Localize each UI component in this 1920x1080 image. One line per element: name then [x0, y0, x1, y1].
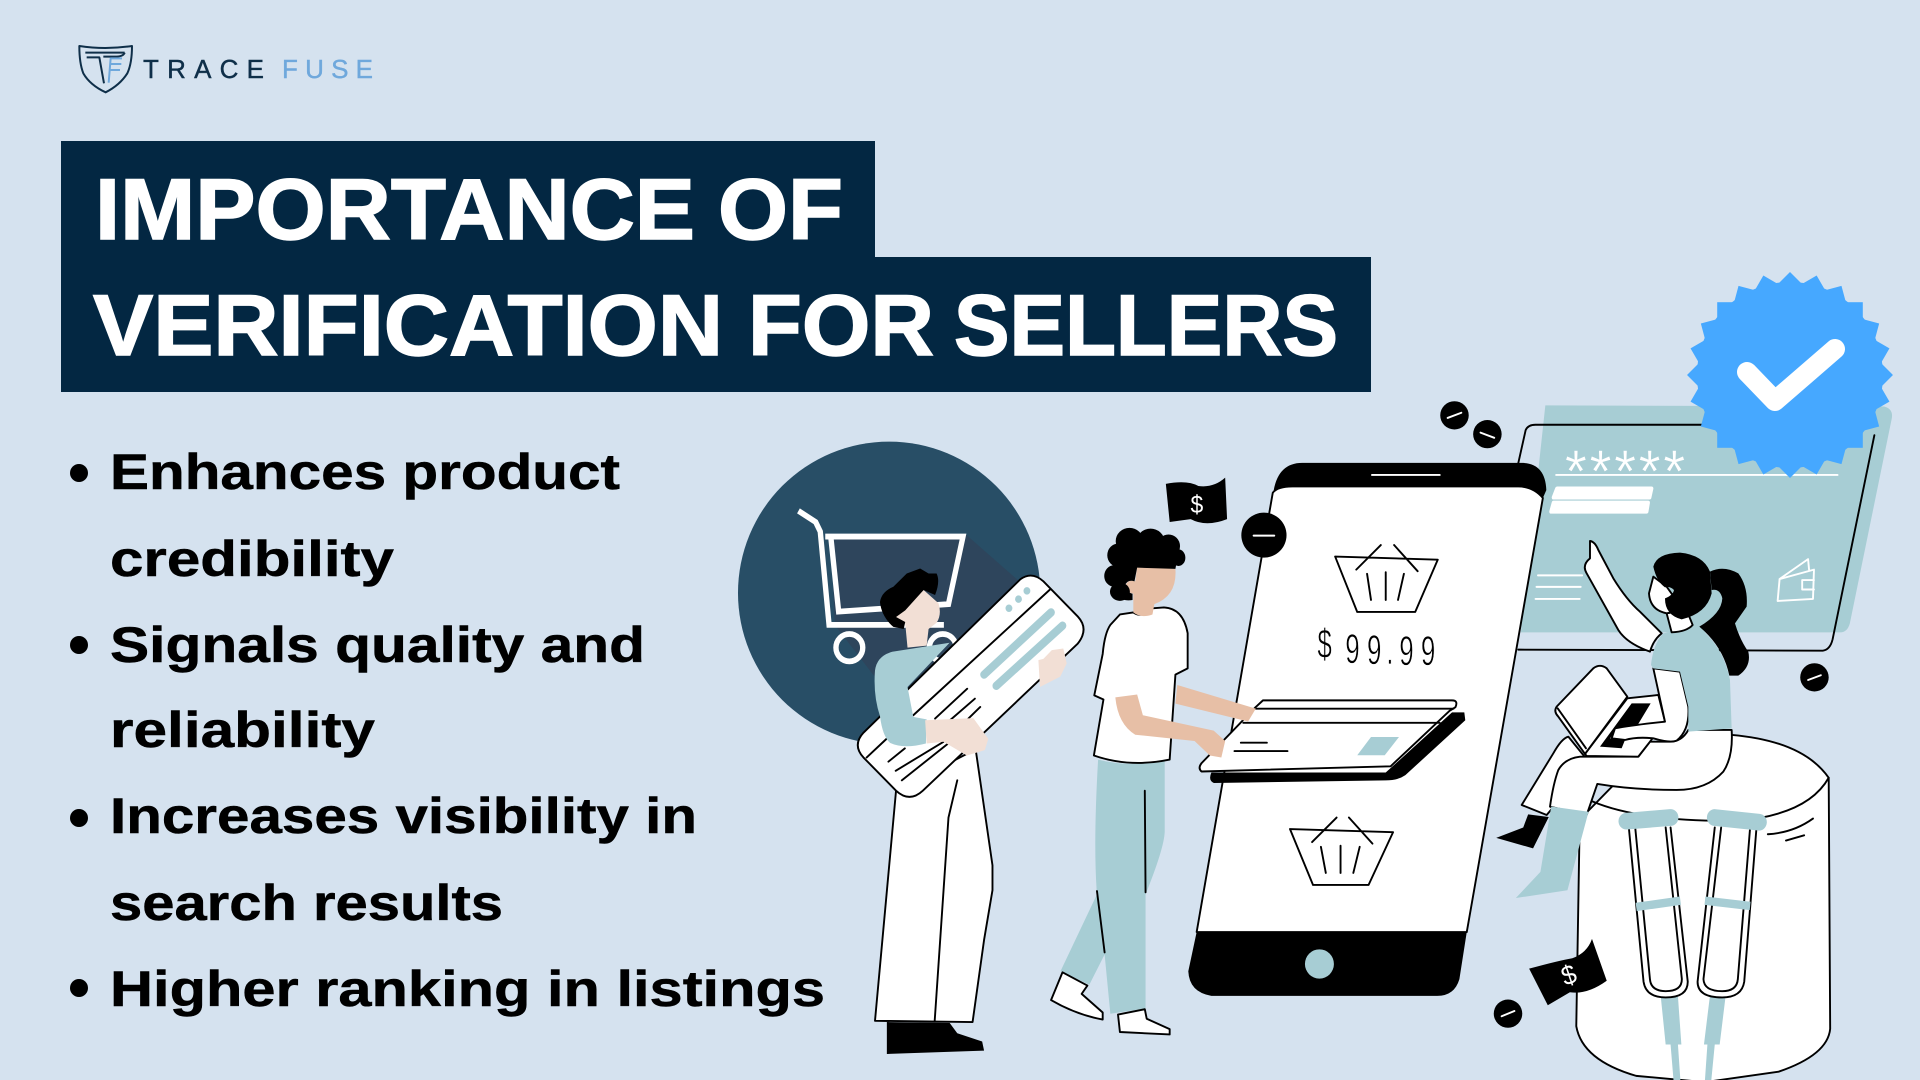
icon: basket bottom: [1290, 818, 1393, 885]
icon: dollar bill top: $: [1190, 491, 1203, 519]
circle backdrop with cart: [738, 442, 1045, 745]
stool: [1576, 735, 1830, 1080]
bullet 4: Higher ranking in listings: [110, 961, 825, 1017]
woman hair: [1653, 553, 1712, 619]
illustration: crutches, boot and bill: [1516, 807, 1759, 1080]
price: $99.99: [1317, 621, 1435, 675]
bullet 2: Signals quality and: [110, 617, 645, 673]
bullet 2: reliability: [110, 702, 375, 758]
phone: [1188, 463, 1546, 996]
payment card on phone: [1200, 700, 1465, 783]
logo: Trace Fuse: [79, 46, 373, 92]
minus coin on phone: [1241, 513, 1287, 558]
verified badge: [1687, 272, 1893, 478]
woman boot: [1516, 807, 1589, 898]
title line 2: SELLERS: [954, 278, 1338, 374]
woman face: [1649, 577, 1683, 613]
woman raised arm: [1585, 541, 1662, 652]
bullet list: [70, 444, 825, 1017]
tablet: [1555, 666, 1665, 757]
back card panel: *****: [1563, 439, 1685, 506]
icon: dollar bill top: [1166, 478, 1227, 523]
illustration: man with card and shopper: [738, 442, 1256, 1054]
badge star: [1687, 272, 1893, 478]
bullet 1: Enhances product: [110, 444, 620, 500]
back card panel: [1518, 405, 1892, 651]
title banner: [61, 141, 1371, 392]
woman neck: [1667, 610, 1693, 632]
bullet 1: [70, 444, 620, 587]
title line 1: OF: [718, 162, 843, 258]
woman back leg: [1522, 737, 1590, 815]
illustration: back card, phone and stool: [1188, 401, 1892, 1080]
bullet 3: search results: [110, 875, 503, 931]
title line 1: IMPORTANCE: [95, 162, 695, 258]
title line 2: FOR: [748, 278, 934, 374]
woman shirt: [1651, 627, 1732, 732]
small minus coins: [1440, 401, 1829, 1028]
title line 2: VERIFICATION: [93, 278, 723, 374]
icon: dollar bill bottom: $: [1557, 958, 1581, 992]
woman ponytail: [1699, 569, 1749, 676]
crutches: [1626, 818, 1759, 1080]
logo wordmark: FUSE: [282, 54, 373, 84]
icon: shield: [79, 46, 132, 92]
title line 2: [93, 278, 1338, 374]
logo wordmark: TRACE: [143, 54, 264, 84]
icon: basket top: [1335, 545, 1438, 612]
icon: check mark: [1747, 349, 1835, 401]
bullet 2: [70, 617, 645, 758]
woman lower arm: [1612, 668, 1688, 742]
man with large card: [858, 568, 1084, 1054]
bullet 3: Increases visibility in: [110, 788, 697, 844]
woman front leg: [1550, 730, 1732, 815]
bullet 3: [70, 788, 697, 931]
icon: dollar bill bottom: [1529, 939, 1607, 1005]
bullet 1: credibility: [110, 531, 394, 587]
shopper: [1051, 528, 1256, 1034]
title background: [61, 141, 1371, 392]
woman: [1522, 541, 1749, 815]
woman back shoe: [1496, 814, 1549, 848]
